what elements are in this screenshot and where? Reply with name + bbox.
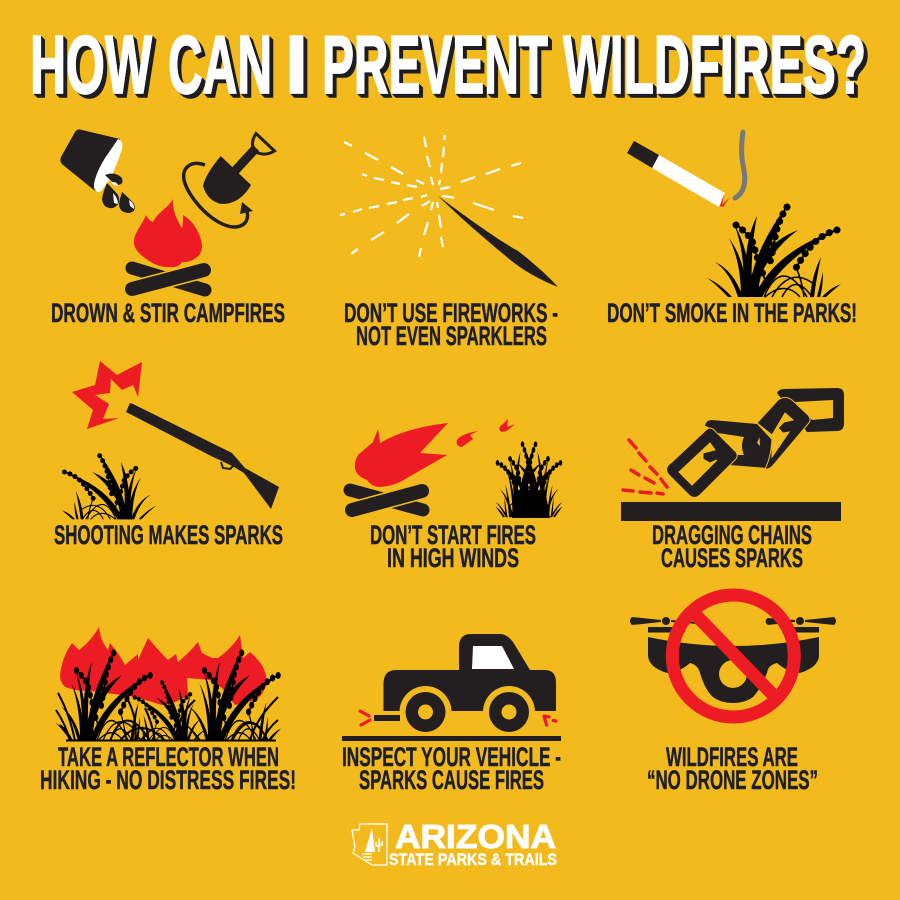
- icon: grass: [62, 454, 156, 519]
- panel: high winds: [350, 419, 562, 573]
- label: SPARKS CAUSE FIRES: [359, 765, 544, 795]
- label: WILDFIRES ARE: [666, 742, 798, 772]
- title: PREVENT: [322, 18, 548, 111]
- title: I: [285, 18, 308, 111]
- panel: drown and stir campfires: [51, 129, 285, 328]
- icon: road: [342, 736, 561, 741]
- icon: grass: [707, 204, 841, 297]
- icon: muzzle flash: [72, 361, 142, 429]
- label: INSPECT YOUR VEHICLE -: [342, 742, 561, 772]
- wordmark: ARIZONA: [395, 818, 556, 855]
- label: DON’T USE FIREWORKS -: [344, 298, 558, 328]
- icon: chain: [667, 388, 844, 498]
- panel: no fireworks: [340, 135, 558, 351]
- icon: cigarette: [627, 132, 745, 207]
- label: [344, 298, 558, 351]
- panel: reflector, no distress fires: [40, 627, 296, 795]
- label: HIKING - NO DISTRESS FIRES!: [40, 765, 296, 795]
- panel: no drone zones: [630, 595, 836, 795]
- panel: shooting makes sparks: [54, 361, 283, 550]
- title: CAN: [168, 18, 272, 111]
- icon: rifle: [126, 403, 279, 509]
- logo: Arizona State Parks & Trails: [352, 818, 557, 869]
- label: IN HIGH WINDS: [387, 543, 519, 573]
- label: [652, 520, 812, 573]
- icon: grass: [496, 442, 562, 518]
- label: NOT EVEN SPARKLERS: [356, 321, 547, 351]
- label: SHOOTING MAKES SPARKS: [54, 520, 283, 550]
- icon: wind-blown campfire: [350, 419, 515, 510]
- panel: dragging chains: [621, 388, 844, 573]
- panel: no smoking: [607, 132, 857, 328]
- label: CAUSES SPARKS: [661, 543, 803, 573]
- icon: water bucket: [60, 129, 135, 213]
- panel: inspect vehicle: [342, 634, 561, 795]
- title: HOW: [30, 18, 152, 111]
- icon: flames: [60, 627, 266, 705]
- tagline: STATE PARKS & TRAILS: [389, 850, 557, 869]
- label: DROWN & STIR CAMPFIRES: [51, 298, 285, 328]
- icon: campfire: [132, 199, 205, 290]
- label: [370, 520, 536, 573]
- title: [30, 18, 866, 111]
- icon: grass: [55, 650, 281, 742]
- icon: sparks: [623, 440, 667, 494]
- label: [647, 742, 818, 795]
- icon: sparks: [360, 711, 556, 725]
- icon: ground: [621, 502, 841, 521]
- icon: shovel: [184, 134, 274, 227]
- icon: prohibition sign: [672, 595, 794, 717]
- icon: Arizona state outline: [352, 824, 387, 865]
- icon: drone: [630, 617, 836, 703]
- icon: pickup truck: [374, 634, 558, 738]
- icon: sparkler: [340, 135, 558, 287]
- label: DON’T START FIRES: [370, 520, 536, 550]
- label: [40, 742, 296, 795]
- label: TAKE A REFLECTOR WHEN: [58, 742, 279, 772]
- label: [342, 742, 561, 795]
